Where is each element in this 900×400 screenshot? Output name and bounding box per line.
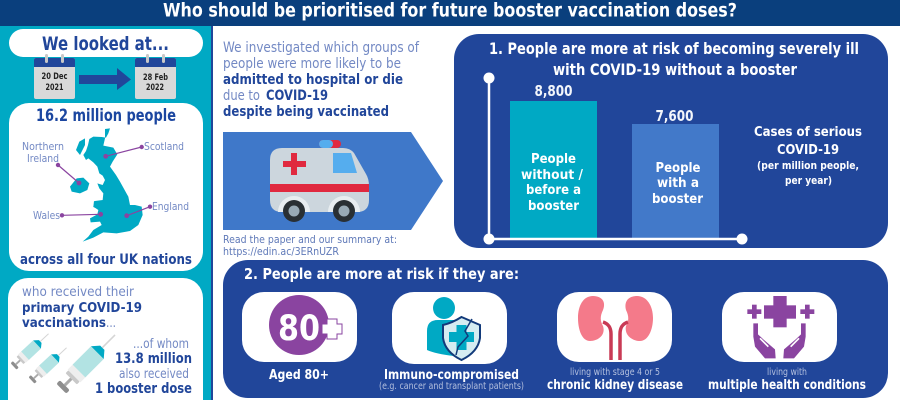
label: Scotland [103, 141, 184, 159]
icon: large syringe [55, 329, 121, 395]
bar: with booster: with a [657, 175, 699, 191]
card: immunocompromised: Immuno-compromised [384, 367, 519, 383]
card: aged 80+ [242, 292, 357, 383]
label: Wales: Wales [33, 210, 60, 222]
icon: small syringe 1 [10, 330, 52, 371]
text: paper link: https://edin.ac/3ERnUZR [223, 246, 339, 258]
heading: we looked at [9, 29, 203, 57]
bar: without booster: without / [521, 167, 583, 183]
text: booster recipients [95, 337, 192, 397]
heading: finding 1: with COVID-19 without a booster [553, 60, 797, 79]
icon: end date calendar [135, 54, 176, 99]
bar: without booster: booster [528, 198, 579, 214]
text: axis description: per year) [785, 175, 832, 187]
text: paper link [223, 234, 397, 258]
text: booster recipients: also received [119, 367, 189, 382]
icon: start date calendar: 2021 [46, 83, 64, 93]
bar: without booster: 8,800 [534, 82, 572, 100]
text: study description: COVID-19 [266, 88, 328, 104]
text: study description: due to [223, 88, 260, 104]
text: primary vaccinations: primary COVID-19 [22, 300, 142, 316]
bar: without booster: People [531, 151, 576, 167]
bar: with booster [632, 107, 719, 238]
text: study description: admitted to hospital or die [223, 72, 403, 88]
bar: without booster: before a [526, 182, 581, 198]
panel: vaccinations [8, 278, 203, 400]
label: England [124, 201, 189, 218]
title banner [0, 0, 900, 26]
chart axes [484, 72, 748, 244]
card: immunocompromised [379, 292, 524, 392]
label: Wales [33, 210, 103, 222]
card: aged 80+: 80 [278, 309, 320, 349]
panel: finding 1 [454, 34, 888, 248]
heading: population: 16.2 million people [36, 106, 176, 125]
text: booster recipients: 1 booster dose [95, 381, 192, 397]
label: Northern Ireland [22, 141, 81, 185]
text: primary vaccinations: ... [106, 315, 116, 331]
text: axis description: (per million people, [757, 160, 859, 172]
text: axis description: COVID-19 [777, 142, 839, 158]
icon: small syringe 2 [28, 344, 70, 385]
text: primary vaccinations [22, 284, 142, 331]
icon: end date calendar: 28 Feb [143, 73, 168, 83]
bar: with booster: booster [652, 191, 703, 207]
text: paper link: Read the paper and our summary at: [223, 234, 397, 246]
label: Northern Ireland: Northern [22, 141, 64, 153]
card: aged 80+: Aged 80+ [269, 367, 329, 383]
text: booster recipients: 13.8 million [115, 351, 192, 367]
heading: finding 1 [489, 39, 859, 79]
label: Scotland: Scotland [144, 141, 184, 153]
label: England: England [152, 201, 189, 213]
bar: with booster: People [656, 160, 700, 176]
icon: start date calendar [34, 54, 75, 99]
card: multiple health conditions: living with [767, 367, 807, 378]
panel: population and map [9, 103, 203, 271]
text: primary vaccinations: vaccinations [22, 315, 106, 331]
text: study description [223, 40, 420, 120]
text: primary vaccinations: who received their [22, 284, 134, 300]
panel: left sidebar [0, 26, 213, 400]
card: immunocompromised: (e.g. cancer and transplant patients) [379, 381, 524, 392]
arrow: blue pointer behind ambulance [223, 132, 443, 230]
title banner: Who should be prioritised for future booster vaccination doses? [163, 0, 737, 22]
bar chart [484, 72, 748, 244]
bar: without booster [510, 82, 597, 238]
heading: we looked at: We looked at... [42, 33, 169, 55]
text: axis description: Cases of serious [754, 124, 862, 140]
icon: end date calendar: 2022 [146, 83, 164, 93]
arrow: date range [79, 68, 131, 90]
label: Northern Ireland: Ireland [27, 153, 59, 165]
heading: finding 2: 2. People are more at risk if they are: [244, 265, 519, 283]
card: chronic kidney disease: chronic kidney disease [547, 377, 683, 393]
bar: with booster: 7,600 [656, 107, 694, 125]
card: chronic kidney disease: living with stage 4 or 5 [570, 367, 660, 378]
icon: start date calendar: 20 Dec [42, 72, 68, 82]
icon: ambulance [270, 140, 369, 222]
text: booster recipients: ...of whom [133, 337, 189, 352]
card: chronic kidney disease [547, 292, 683, 393]
map: United Kingdom [70, 128, 143, 242]
text: study description: people were more likely to be [223, 56, 401, 72]
panel: finding 2 [223, 260, 888, 398]
card: multiple health conditions [708, 292, 866, 393]
text: all four nations: across all four UK nations [20, 252, 192, 268]
text: study description: despite being vaccinated [223, 104, 389, 120]
text: axis description [754, 124, 862, 187]
text: study description: We investigated which groups of [223, 40, 420, 56]
